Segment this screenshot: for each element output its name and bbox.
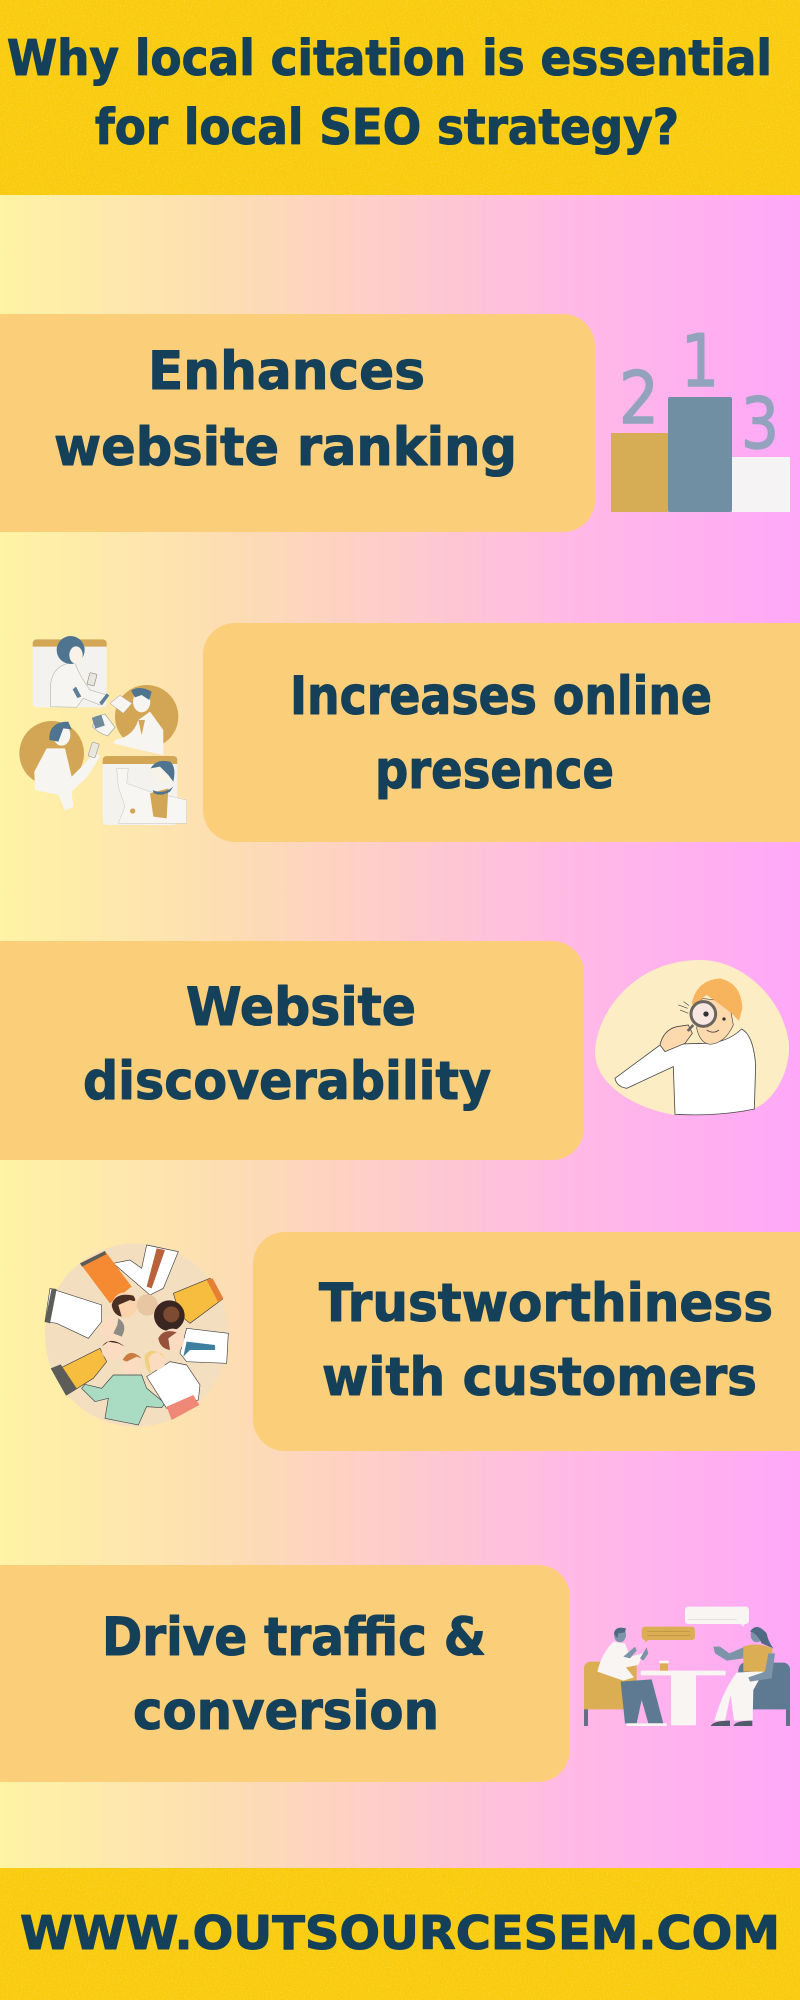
panel: website discoverability: discoverability: [83, 1051, 491, 1112]
panel: drive traffic and conversion: Drive traffic &: [102, 1607, 486, 1668]
panel: enhances website ranking: website ranking: [54, 417, 517, 478]
header banner: [0, 0, 800, 195]
panel: trustworthiness with customers: with customers: [322, 1347, 757, 1408]
panel: increases online presence: presence: [375, 740, 614, 801]
icon: podium: [611, 319, 790, 512]
panel: trustworthiness with customers: [253, 1232, 800, 1451]
panel: trustworthiness with customers: Trustworthiness: [319, 1273, 773, 1334]
icon: podium: 2: [619, 356, 659, 440]
panel: drive traffic and conversion: [0, 1565, 570, 1782]
icon: podium: 1: [681, 319, 719, 403]
panel: website discoverability: Website: [186, 977, 416, 1038]
icon: two people talking at a table: [584, 1607, 790, 1726]
website address: WWW.OUTSOURCESEM.COM: [20, 1906, 780, 1960]
icon: group of people in a circle: [45, 1243, 228, 1427]
icon: podium: 3: [741, 383, 779, 465]
footer banner: [0, 1868, 800, 2000]
icon: person with magnifying glass: [595, 960, 789, 1115]
panel: enhances website ranking: Enhances: [148, 341, 425, 402]
title: [7, 30, 772, 156]
title: for local SEO strategy?: [95, 99, 679, 156]
panel: increases online presence: Increases online: [290, 666, 712, 727]
panel: increases online presence: [203, 623, 800, 842]
icon: people communicating online: [19, 636, 187, 825]
panel: drive traffic and conversion: conversion: [133, 1681, 439, 1742]
panel: enhances website ranking: [0, 314, 595, 532]
panel: website discoverability: [0, 941, 584, 1160]
